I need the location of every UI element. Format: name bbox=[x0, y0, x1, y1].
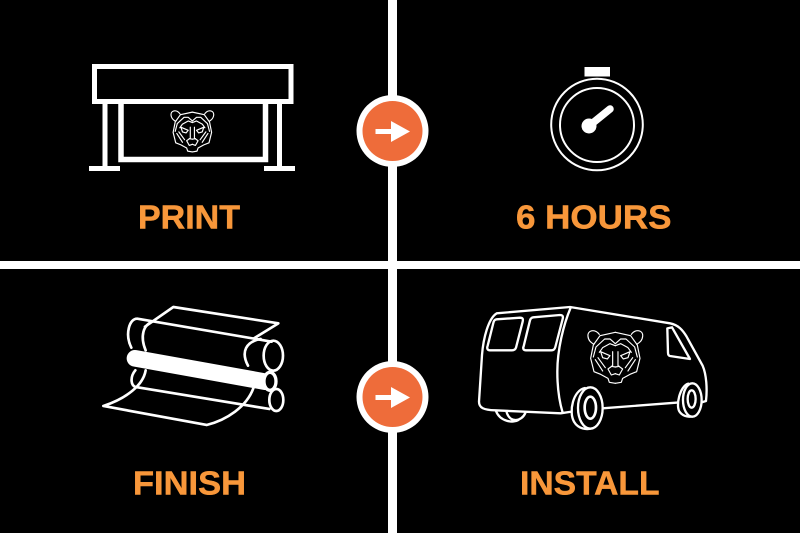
label: FINISH: FINISH bbox=[133, 466, 246, 502]
icon: finishing rollers bbox=[103, 307, 283, 425]
label: INSTALL: INSTALL bbox=[520, 466, 660, 502]
arrow badge: finish to install bbox=[356, 361, 428, 433]
icon: rear wheel bbox=[678, 383, 702, 417]
arrow badge: print to 6 hours bbox=[356, 95, 428, 167]
icon: front wheel bbox=[572, 387, 603, 429]
label: 6 HOURS: 6 HOURS bbox=[516, 200, 672, 236]
icon: printer with tiger print bbox=[89, 66, 295, 168]
icon: tiger head on van bbox=[588, 331, 643, 383]
label: PRINT: PRINT bbox=[138, 200, 241, 236]
icon: stopwatch bbox=[551, 67, 643, 170]
icon: tiger head on printer bbox=[171, 111, 214, 152]
icon: van with tiger bbox=[479, 307, 707, 429]
